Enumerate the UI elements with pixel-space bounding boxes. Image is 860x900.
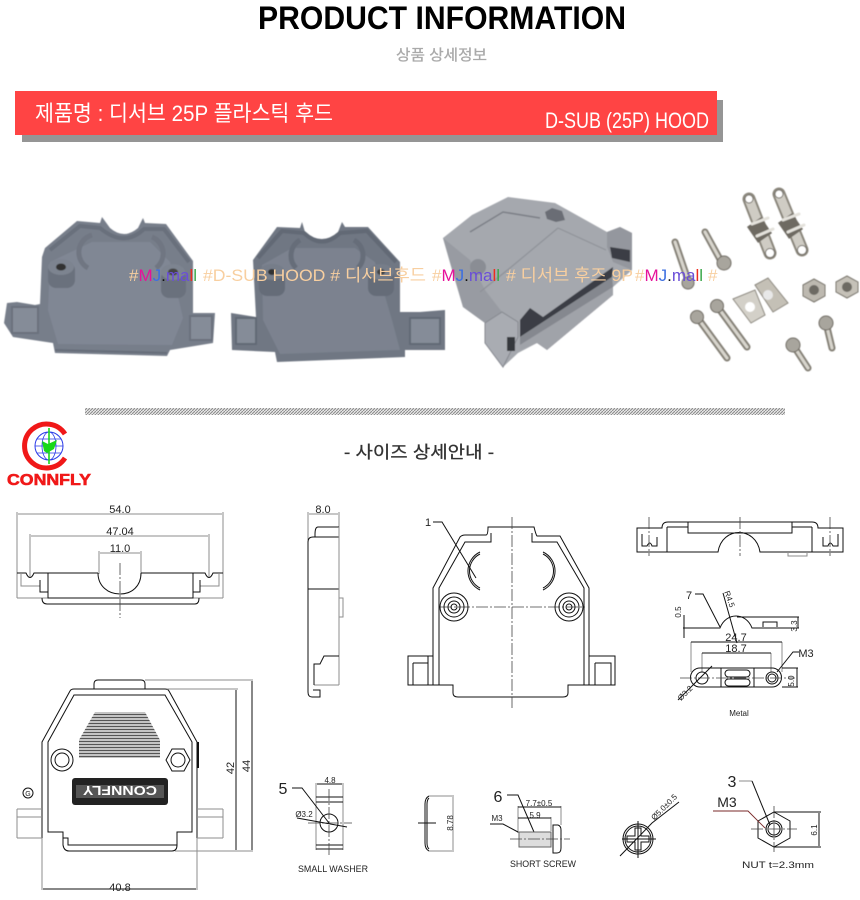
drawing: metal strap [674, 590, 814, 718]
drawing: metal strap: 24.7 [725, 632, 747, 644]
drawing: short screw: SHORT SCREW [510, 859, 576, 869]
drawing: side view: 8.0 [315, 504, 331, 516]
watermark line: # [708, 266, 718, 285]
callout 7: 7 [686, 590, 692, 602]
watermark line: #MJ.mall [432, 266, 500, 285]
drawing: screw head [620, 792, 679, 858]
registered mark: G [25, 791, 31, 798]
drawing: top view [637, 517, 843, 556]
drawing: short screw: 6 [494, 789, 503, 806]
drawing: washer side: 8.78 [446, 815, 455, 831]
drawing: short screw: 5.9 [529, 811, 541, 820]
photo: open hood half 1 [4, 217, 215, 356]
drawing: nut: NUT t=2.3mm [742, 860, 814, 870]
drawing: small washer: 4.8 [324, 776, 336, 785]
drawing: front view with width dimensions: 54.0 [109, 504, 131, 516]
drawing: hood outer view [17, 680, 253, 894]
logo: Connfly: CONNFLY [7, 472, 91, 489]
metal strap 1 [745, 195, 774, 258]
washers [733, 278, 788, 323]
metal strap 2 [775, 190, 806, 254]
drawing: nut: 3 [728, 774, 737, 791]
drawing: metal strap: 3.3 [790, 620, 799, 632]
screws [675, 232, 833, 368]
watermark line [129, 266, 718, 285]
watermark line: #MJ.mall [129, 266, 197, 285]
drawing: small washer [279, 776, 368, 874]
drawing: metal strap: 18.7 [725, 643, 747, 655]
drawing: inside view of hood [408, 517, 615, 708]
callout 1 [425, 517, 476, 578]
drawing: short screw [490, 789, 576, 869]
drawing: nut: 6.1 [810, 824, 819, 836]
nameplate [72, 778, 168, 805]
drawing: hood outer view: 42 [225, 762, 237, 774]
drawing: hood outer view: 40.8 [109, 882, 131, 894]
section heading: - 사이즈 상세안내 - [344, 443, 494, 462]
drawing: side view [308, 504, 343, 697]
title: PRODUCT INFORMATION [258, 0, 626, 36]
drawing: screw head: Ø5.0±0.5 [649, 792, 679, 822]
drawing: short screw: 7.7±0.5 [526, 799, 553, 808]
subtitle: 상품 상세정보 [396, 47, 487, 64]
photo: metal hardware [675, 190, 858, 368]
product name banner [15, 91, 723, 142]
drawing: metal strap: Metal [729, 709, 749, 718]
drawing: short screw: M3 [491, 814, 503, 823]
drawing: front view with width dimensions: 11.0 [110, 543, 130, 555]
drawing: nut: M3 [717, 794, 737, 810]
drawing: metal strap: 0.5 [674, 606, 683, 618]
registered mark [23, 788, 33, 798]
drawing: metal strap: Ø3.2 [676, 684, 695, 703]
product name English: D-SUB (25P) HOOD [545, 108, 709, 133]
drawing: metal strap: M3 [798, 648, 814, 660]
logo: Connfly [7, 424, 91, 489]
drawing: small washer: Ø3.2 [295, 810, 313, 819]
drawing: hood outer view: 44 [241, 760, 253, 772]
drawing: small washer: SMALL WASHER [298, 864, 368, 874]
photo: open hood half 2 [231, 222, 445, 362]
nameplate: CONNFLY [83, 783, 157, 798]
product name Korean: 제품명 : 디서브 25P 플라스틱 후드 [35, 101, 333, 126]
photo: assembled hood [443, 197, 632, 367]
drawing: washer side [418, 796, 455, 851]
drawing: metal strap: R4.5 [722, 590, 737, 609]
drawing: nut [713, 774, 821, 870]
watermark line: #D-SUB HOOD # 디서브후드 [203, 266, 426, 285]
callout 1: 1 [425, 517, 431, 529]
drawing: small washer: 5 [279, 781, 288, 798]
watermark line: #MJ.mall [635, 266, 703, 285]
drawing: front view with width dimensions: 47.04 [106, 526, 134, 538]
drawing: front view with width dimensions [17, 504, 223, 618]
watermark line: # 디서브 후즈 9P [506, 266, 633, 285]
drawing: metal strap: 5.0 [787, 675, 796, 687]
nuts [803, 276, 858, 302]
